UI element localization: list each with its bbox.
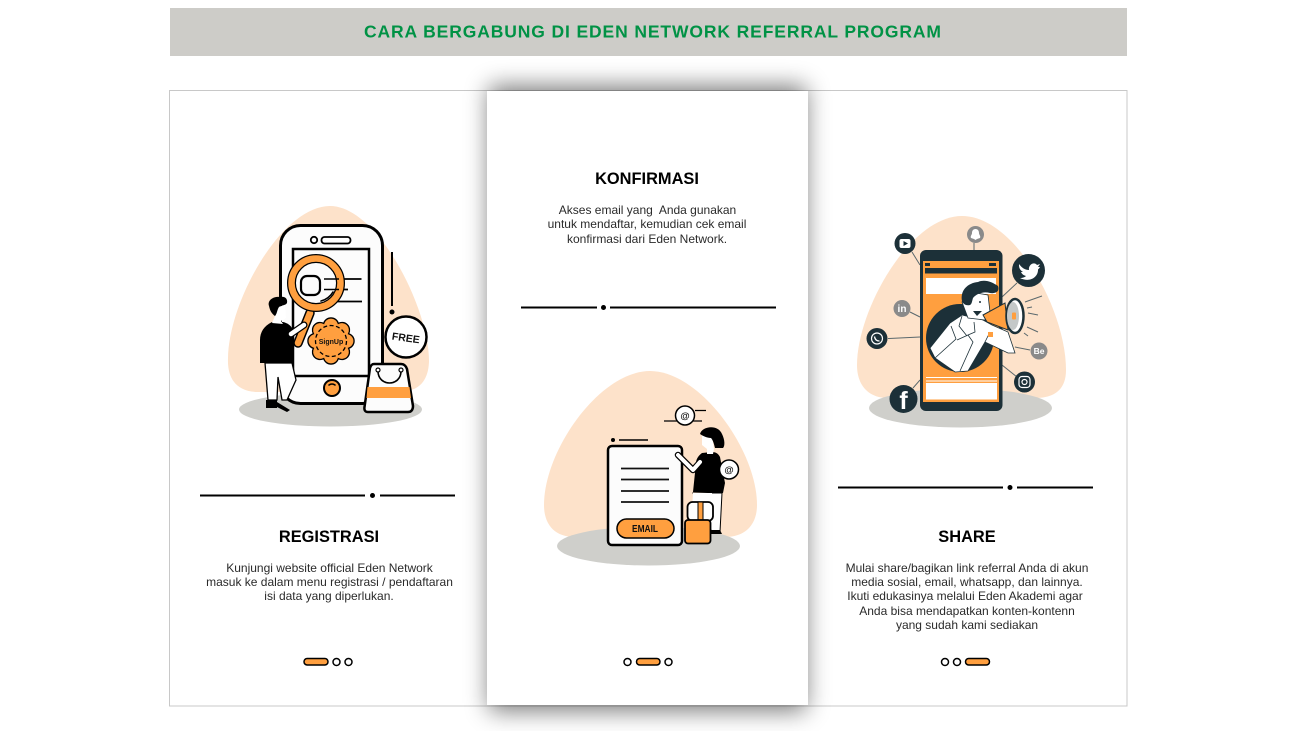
description: masuk ke dalam menu registrasi / pendaftaran: [206, 575, 453, 589]
pagination: [624, 658, 672, 666]
description: Kunjungi website official Eden Network: [226, 561, 434, 575]
connector lines: [888, 243, 1030, 388]
description: Anda bisa mendapatkan konten-kontenn: [859, 604, 1075, 618]
blob: [857, 216, 1066, 398]
heading: KONFIRMASI: [595, 170, 699, 188]
shopping bag: [364, 364, 413, 412]
divider: [200, 493, 455, 498]
icon: twitter: [1012, 254, 1045, 287]
pagination: [942, 658, 990, 666]
icon: behance: [1030, 342, 1048, 360]
sign up badge: [308, 318, 354, 364]
blob: [228, 206, 429, 392]
outer card frame: [170, 90, 1127, 706]
description: [548, 203, 746, 246]
mail document: EMAIL: [632, 524, 658, 535]
woman: [678, 427, 725, 534]
icon: behance: Be: [1034, 346, 1045, 356]
icon: snapchat: [967, 226, 984, 243]
description: media sosial, email, whatsapp, dan lainnya.: [851, 575, 1083, 589]
ground shadow: [557, 526, 740, 566]
icon: facebook: f: [899, 387, 908, 415]
icon: linkedin: [894, 300, 910, 317]
at sign bubble side: [720, 460, 738, 479]
panel: share: [838, 216, 1093, 666]
blob: [544, 371, 757, 537]
description: konfirmasi dari Eden Network.: [567, 232, 727, 246]
at sign bubble side: @: [724, 465, 734, 476]
divider: [838, 485, 1093, 490]
panel: konfirmasi: [521, 170, 776, 666]
ground shadow: [239, 392, 422, 426]
mail document: [608, 438, 682, 545]
panel: registrasi: [200, 206, 455, 666]
illustration: social media phone: [857, 216, 1066, 428]
panel shadow: [489, 86, 806, 711]
title banner: CARA BERGABUNG DI EDEN NETWORK REFERRAL PROGRAM: [364, 22, 941, 42]
at sign bubble top: [664, 406, 706, 425]
icon: youtube: [894, 233, 916, 254]
magnifying glass: [292, 258, 340, 343]
luggage: [685, 502, 713, 544]
illustration: phone sign up: [228, 206, 429, 426]
sign up badge: SignUp: [319, 339, 343, 346]
phone: [280, 226, 382, 404]
heading: REGISTRASI: [279, 528, 379, 546]
description: untuk mendaftar, kemudian cek email: [548, 217, 746, 231]
ground shadow: [869, 388, 1052, 428]
free tag: [386, 252, 426, 358]
icon: facebook: [890, 385, 918, 415]
man with megaphone: [926, 281, 1042, 372]
panel: konfirmasi background: [487, 91, 808, 705]
description: Ikuti edukasinya melalui Eden Akademi agar: [847, 589, 1083, 603]
title banner: [170, 8, 1127, 56]
description: Akses email yang Anda gunakan: [559, 203, 736, 217]
illustration: email: [544, 371, 757, 566]
at sign bubble top: @: [680, 411, 690, 422]
description: isi data yang diperlukan.: [264, 589, 394, 603]
description: [206, 561, 453, 603]
description: Mulai share/bagikan link referral Anda di akun: [846, 561, 1088, 575]
icon: instagram: [1014, 372, 1035, 392]
phone: [920, 250, 1002, 411]
description: yang sudah kami sediakan: [896, 618, 1038, 632]
free tag: FREE: [391, 331, 420, 346]
icon: linkedin: in: [898, 304, 906, 315]
heading: SHARE: [938, 528, 996, 546]
icon: whatsapp: [866, 328, 888, 349]
person: [260, 297, 304, 412]
divider: [521, 305, 776, 310]
description: [846, 561, 1088, 632]
pagination: [304, 658, 352, 666]
